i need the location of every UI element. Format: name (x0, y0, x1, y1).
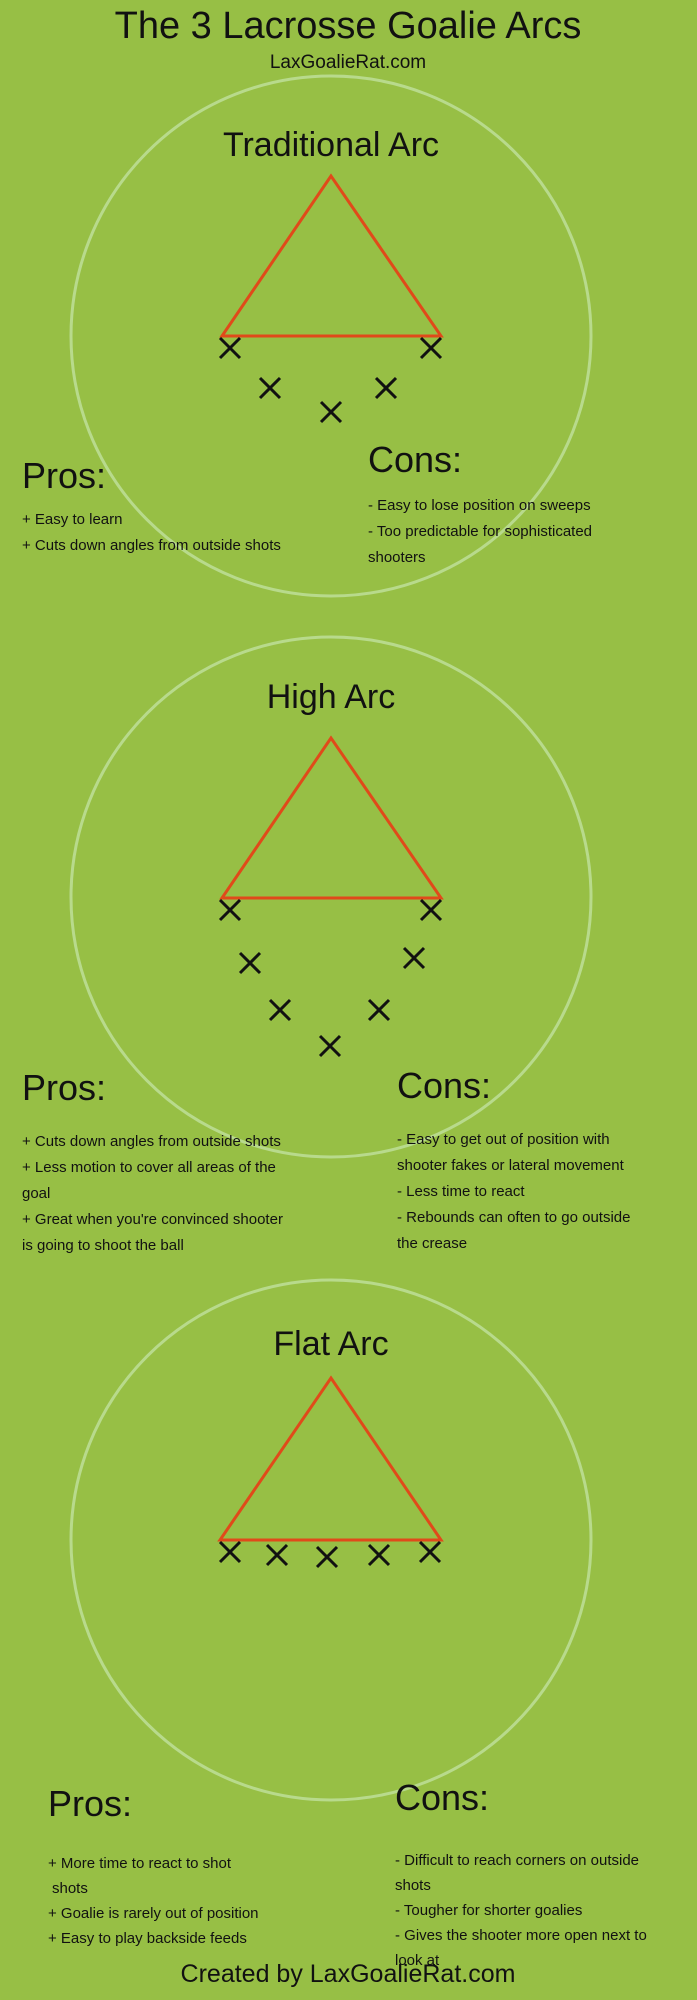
pros: is going to shoot the ball (22, 1237, 184, 1254)
circle: flat (71, 1280, 591, 1800)
pros: + Great when you're convinced shooter (22, 1211, 283, 1228)
cons: - Easy to get out of position with (397, 1131, 610, 1148)
pros: + Cuts down angles from outside shots (22, 1133, 281, 1150)
pros: + Cuts down angles from outside shots (22, 537, 281, 554)
heading: flat arc: Flat Arc (273, 1325, 389, 1363)
cons: - Easy to lose position on sweeps (368, 497, 591, 514)
cons: Cons: (368, 439, 462, 480)
cons: - Tougher for shorter goalies (395, 1902, 582, 1919)
panel: traditional arc (22, 76, 592, 596)
cons (395, 1777, 647, 1969)
circle: traditional (71, 76, 591, 596)
cons (397, 1065, 630, 1252)
pros: + More time to react to shot (48, 1855, 232, 1872)
footer: Created by LaxGoalieRat.com (181, 1960, 515, 1988)
pros (22, 455, 281, 554)
pros: + Easy to play backside feeds (48, 1930, 247, 1947)
cons: - Gives the shooter more open next to (395, 1927, 647, 1944)
triangle: goal (222, 738, 441, 898)
pros (48, 1783, 259, 1947)
cons: shots (395, 1877, 431, 1894)
cons: - Too predictable for sophisticated (368, 523, 592, 540)
heading: high arc: High Arc (267, 678, 395, 716)
goalie positions (220, 900, 441, 1056)
cons (368, 439, 592, 566)
cons: shooters (368, 549, 426, 566)
goalie positions (220, 1542, 440, 1567)
cons: - Rebounds can often to go outside (397, 1209, 630, 1226)
pros: Pros: (22, 455, 106, 496)
pros: shots (52, 1880, 88, 1897)
circle: high (71, 637, 591, 1157)
cons: - Difficult to reach corners on outside (395, 1852, 639, 1869)
panel: flat arc (48, 1280, 647, 1969)
cons: Cons: (395, 1777, 489, 1818)
pros: + Goalie is rarely out of position (48, 1905, 259, 1922)
triangle: goal (222, 176, 441, 336)
pros (22, 1067, 283, 1254)
cons: the crease (397, 1235, 467, 1252)
pros: Pros: (22, 1067, 106, 1108)
goalie positions (220, 338, 441, 422)
subtitle: LaxGoalieRat.com (270, 52, 426, 73)
panel: high arc (22, 637, 630, 1254)
cons: shooter fakes or lateral movement (397, 1157, 625, 1174)
pros: goal (22, 1185, 50, 1202)
cons: - Less time to react (397, 1183, 525, 1200)
cons: Cons: (397, 1065, 491, 1106)
pros: + Less motion to cover all areas of the (22, 1159, 276, 1176)
title: The 3 Lacrosse Goalie Arcs (115, 5, 581, 47)
pros: Pros: (48, 1783, 132, 1824)
heading: traditional arc: Traditional Arc (223, 126, 439, 164)
triangle: goal (220, 1378, 441, 1540)
cons: look at (395, 1952, 440, 1969)
pros: + Easy to learn (22, 511, 122, 528)
